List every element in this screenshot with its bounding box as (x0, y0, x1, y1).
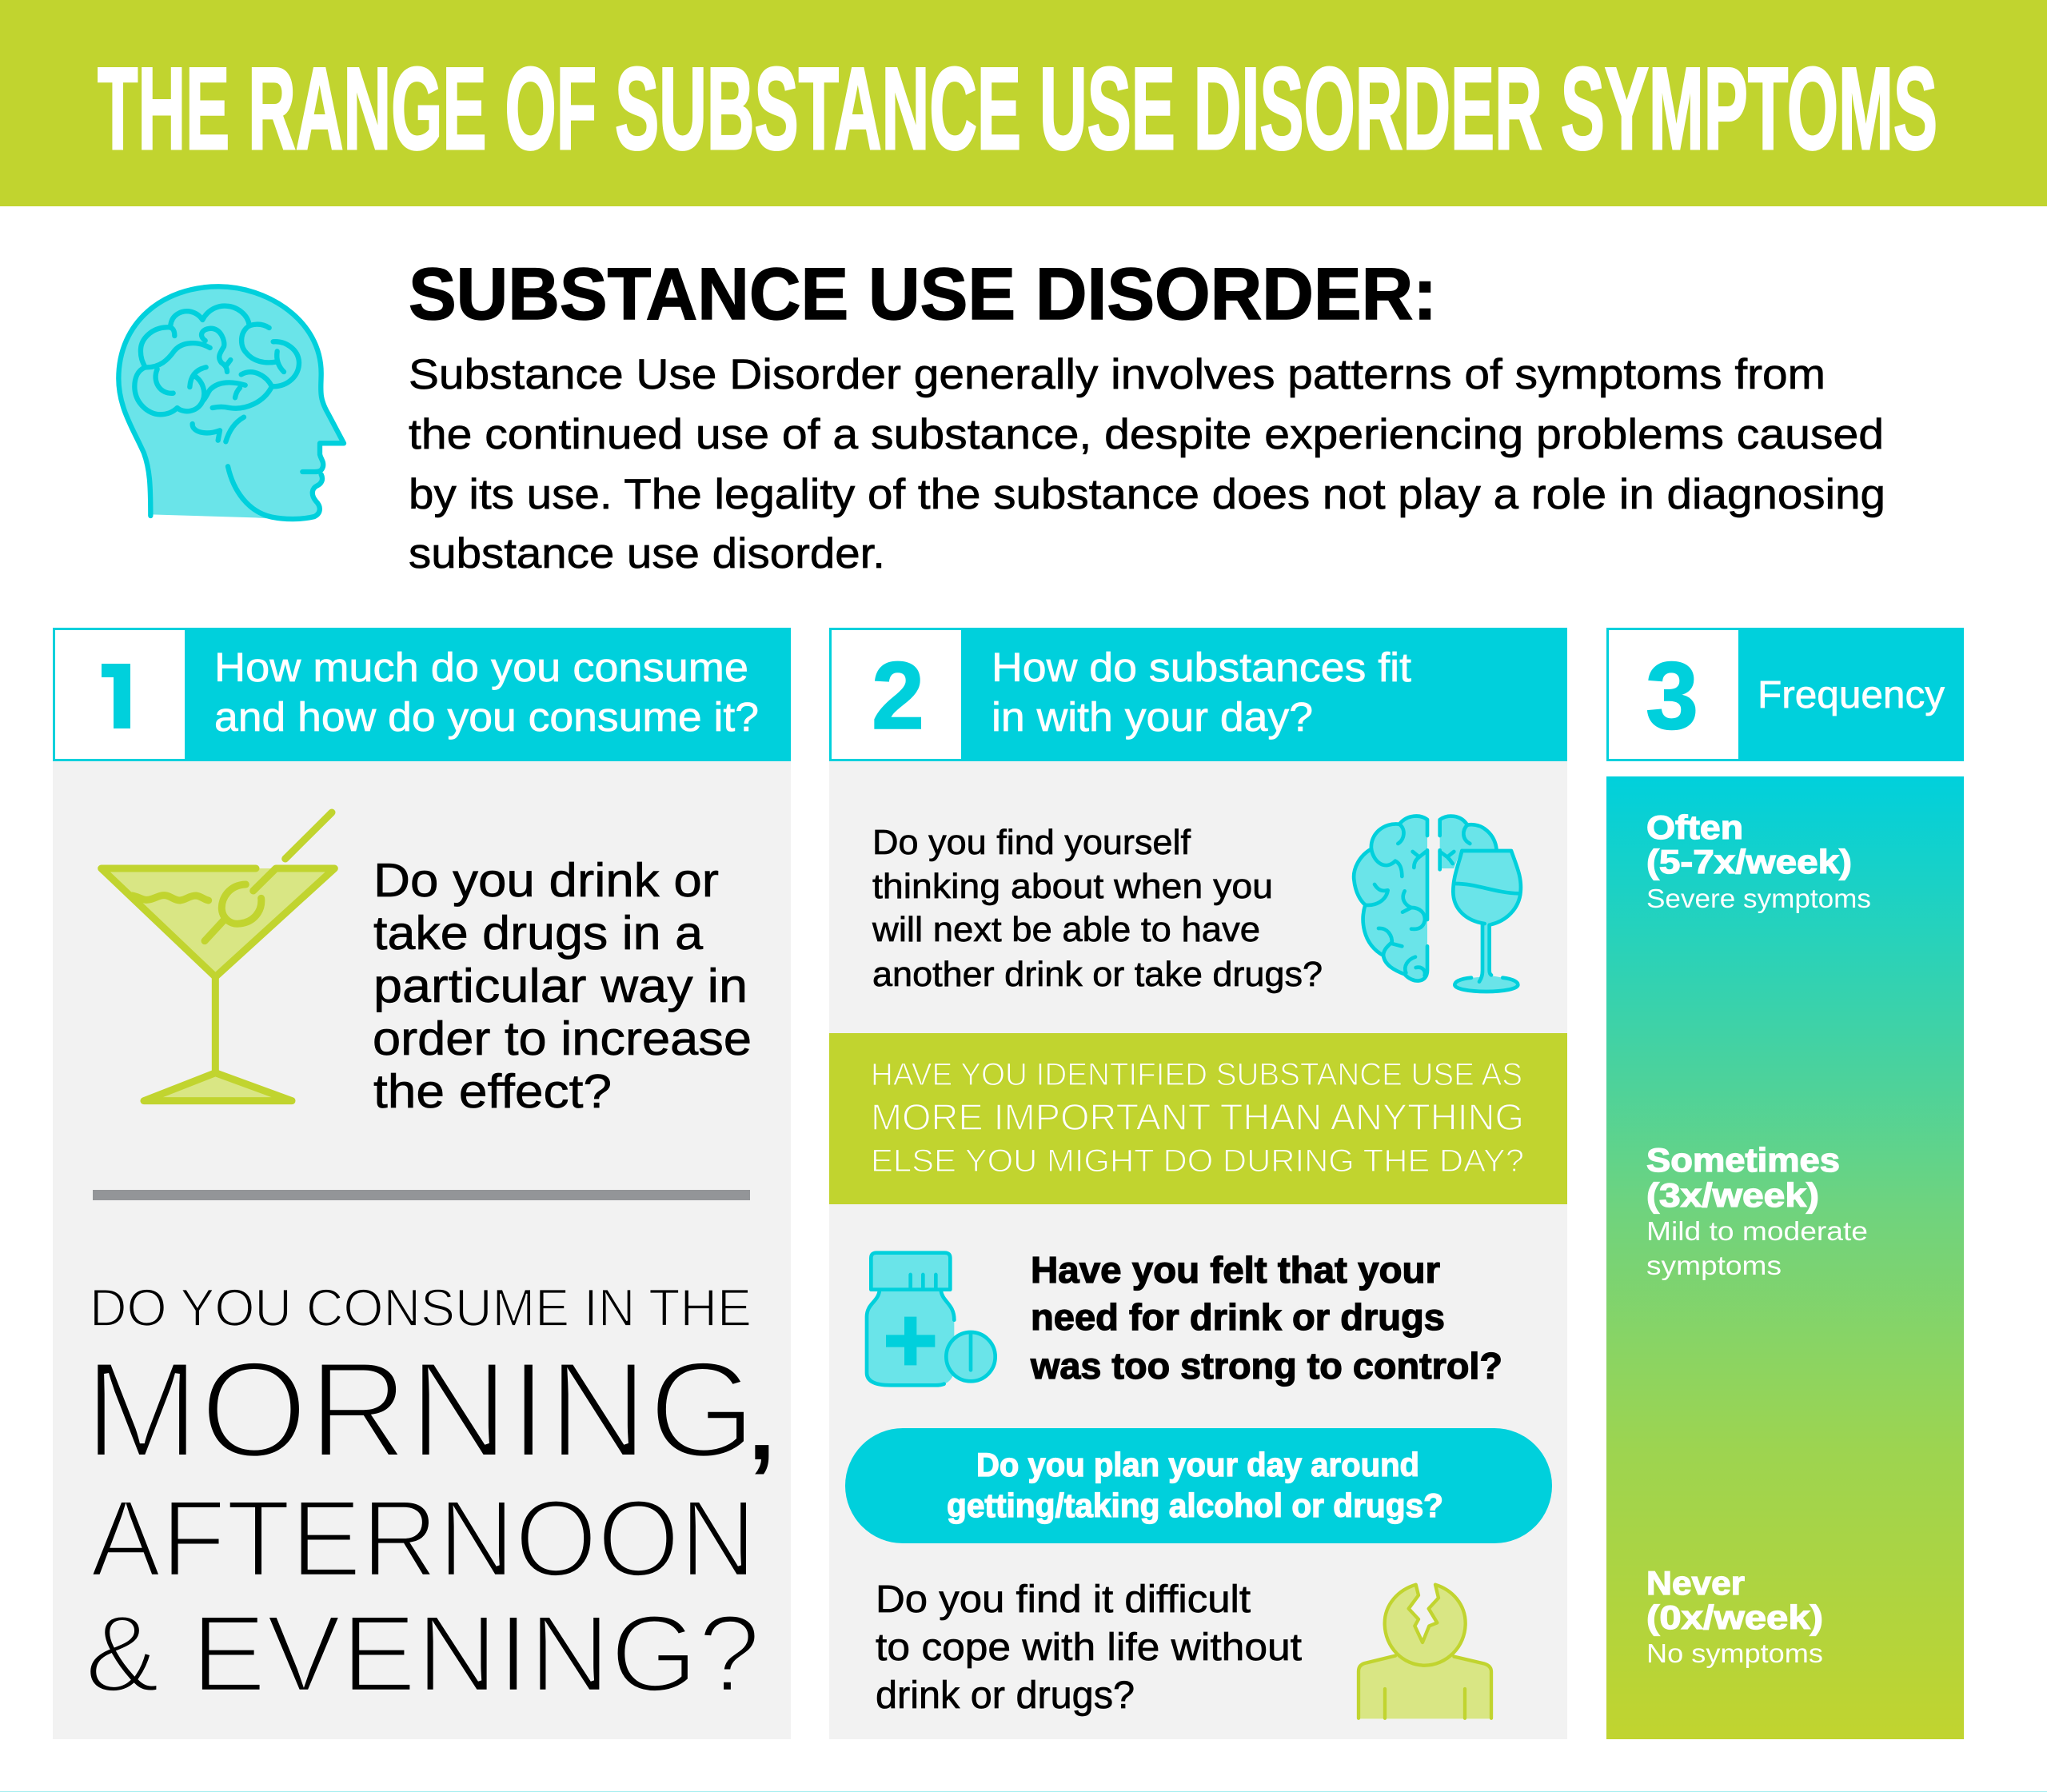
panel 1 body (53, 761, 791, 1739)
callout: more important than anything: MORE IMPORTANT THAN ANYTHING (871, 1096, 1524, 1138)
heading: substance use disorder: SUBSTANCE USE DISORDER: (409, 253, 1437, 335)
frequency: sometimes: symptoms (1646, 1251, 1782, 1280)
question: thinking about next drink (872, 823, 1323, 994)
large question: time of day: & EVENING? (85, 1593, 760, 1715)
title banner (0, 0, 2047, 206)
panel 2: daily routine (829, 628, 1567, 1739)
icon: head with brain (118, 286, 344, 519)
question: need too strong to control (1030, 1249, 1502, 1387)
question: difficult to cope: drink or drugs? (876, 1674, 1135, 1717)
frequency: never: (0x/week) (1646, 1598, 1823, 1636)
intro paragraph: the continued use of a substance, despite experiencing problems caused (409, 411, 1884, 458)
large question: time of day (84, 1278, 775, 1715)
question: drink or take drugs: particular way in (373, 960, 748, 1012)
question: thinking about next drink: another drink or take drugs? (872, 955, 1323, 994)
icon: martini glass (102, 812, 334, 1101)
question: thinking about next drink: will next be able to have (872, 910, 1260, 949)
callout: plan your day: getting/taking alcohol or drugs? (947, 1487, 1443, 1524)
panel 3: frequency (1606, 628, 1964, 1739)
question: drink or take drugs (373, 854, 752, 1118)
intro paragraph (409, 351, 1885, 577)
callout: more important than anything: HAVE YOU IDENTIFIED SUBSTANCE USE AS (871, 1057, 1522, 1092)
callout: more important than anything: ELSE YOU MIGHT DO DURING THE DAY? (871, 1143, 1524, 1179)
question: drink or take drugs: order to increase (373, 1012, 752, 1065)
question: drink or take drugs: Do you drink or (373, 854, 719, 907)
frequency: never (1646, 1564, 1823, 1668)
question: difficult to cope: to cope with life without (876, 1626, 1302, 1669)
intro paragraph: Substance Use Disorder generally involves patterns of symptoms from (409, 351, 1826, 398)
large question: time of day: MORNING (84, 1333, 756, 1487)
panel 1: consumption (53, 628, 791, 1739)
frequency: never: Never (1646, 1564, 1745, 1602)
frequency: never: No symptoms (1646, 1638, 1823, 1668)
panel 1 header: and how do you consume it? (214, 694, 759, 740)
large question: time of day: DO YOU CONSUME IN THE (90, 1278, 752, 1337)
icon: brain and wine glass (1354, 816, 1521, 992)
frequency: sometimes: Mild to moderate (1646, 1216, 1868, 1246)
frequency: often: (5-7x/week) (1646, 843, 1852, 880)
large question: time of day: AFTERNOON (90, 1478, 756, 1600)
question: thinking about next drink: Do you find yourself (872, 823, 1191, 862)
frequency: sometimes: (3x/week) (1646, 1176, 1819, 1214)
icon: person with cracked head (1358, 1585, 1491, 1718)
panel 1 header: How much do you consume (214, 645, 748, 690)
question: need too strong to control: was too strong to control? (1030, 1345, 1502, 1387)
panel 2 header: in with your day? (992, 694, 1313, 740)
icon: pill bottle (866, 1253, 996, 1385)
panel 2 header (829, 628, 1567, 761)
question: need too strong to control: Have you felt that your (1031, 1249, 1440, 1291)
question: need too strong to control: need for drink or drugs (1031, 1296, 1445, 1338)
question: drink or take drugs: take drugs in a (373, 907, 703, 960)
panel 1 header: 1 (91, 644, 144, 749)
question: difficult to cope: Do you find it difficult (876, 1578, 1251, 1621)
panel 2 header: 2 (872, 642, 924, 749)
callout: plan your day: Do you plan your day around (976, 1446, 1419, 1483)
question: thinking about next drink: thinking about when you (872, 867, 1273, 906)
frequency: often: Often (1646, 808, 1743, 846)
panel 2 header: How do substances fit (992, 645, 1411, 690)
frequency: sometimes (1646, 1141, 1868, 1280)
panel 3 header: 3 (1646, 642, 1698, 749)
panel 1 header (53, 628, 791, 761)
frequency gradient bar (1606, 776, 1964, 1739)
frequency: often (1646, 808, 1871, 913)
intro paragraph: by its use. The legality of the substance does not play a role in diagnosing (409, 471, 1885, 518)
panel 3 header (1606, 628, 1964, 761)
callout: plan your day (845, 1428, 1552, 1543)
large question: time of day: , (748, 1373, 775, 1480)
intro paragraph: substance use disorder. (409, 530, 885, 577)
frequency: sometimes: Sometimes (1646, 1141, 1840, 1179)
question: drink or take drugs: the effect? (373, 1065, 612, 1118)
panel 2 body (829, 761, 1567, 1739)
callout: more important than anything (829, 1033, 1567, 1204)
frequency: often: Severe symptoms (1646, 884, 1871, 913)
question: difficult to cope (876, 1578, 1302, 1717)
panel 3 header: Frequency (1758, 674, 1945, 716)
